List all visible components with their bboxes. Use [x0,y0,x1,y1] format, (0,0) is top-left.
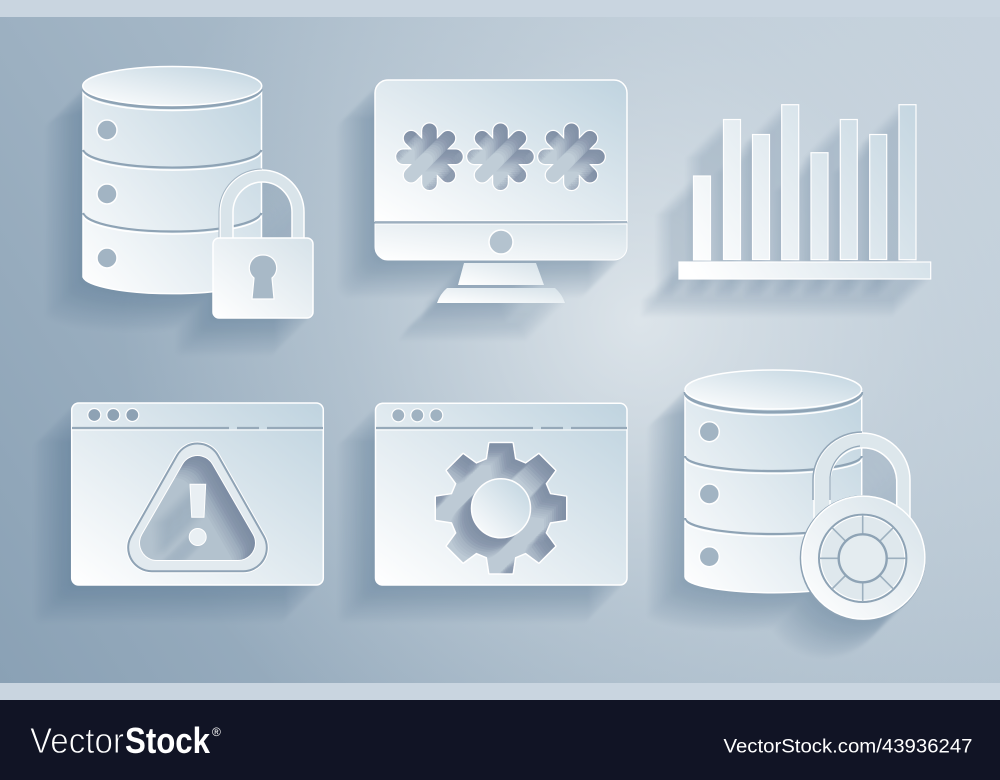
icon: database with padlock [83,66,313,318]
cylinder separators [83,89,262,234]
keyhole [249,255,277,299]
icon: browser window with warning [72,403,323,590]
window panel [72,403,323,585]
padlock body [213,238,313,318]
window dots [392,409,443,422]
indicator holes [97,120,117,268]
combination dial [800,495,926,621]
gear cut-out [434,442,568,575]
gear centre disc [472,479,530,538]
monitor stand [458,263,544,285]
cylinder body [83,90,262,294]
window dots [88,408,139,422]
icon: bar chart [679,105,931,279]
window panel [376,403,627,585]
chart bars [694,105,916,260]
monitor chin [375,224,627,260]
image id url: VectorStock.com/43936247 [724,737,972,758]
VectorStock logo [30,720,221,761]
icon: database with combination lock [685,370,926,621]
lock shackle [814,433,910,520]
cylinder top ellipse [685,370,862,409]
warning triangle hole [140,456,255,560]
VectorStock logo: ® [212,725,221,739]
VectorStock logo: Stock [125,720,211,761]
exclamation mark [189,484,206,546]
cylinder top ellipse [83,66,262,106]
title bar divider [72,427,323,429]
indicator holes [699,422,719,567]
monitor screen [375,80,627,221]
VectorStock logo: Vector [30,720,124,761]
padlock shackle [220,170,304,240]
warning triangle ring [152,467,243,548]
chart baseline [679,262,931,279]
footer bar [0,700,1000,780]
password asterisks [395,122,606,192]
monitor base [437,288,565,303]
cylinder body [685,392,862,593]
power button [489,230,513,254]
icon: browser window with gear [371,378,631,638]
cylinder separators [685,392,862,537]
title bar divider [376,427,627,429]
icon: monitor with password [350,80,650,303]
